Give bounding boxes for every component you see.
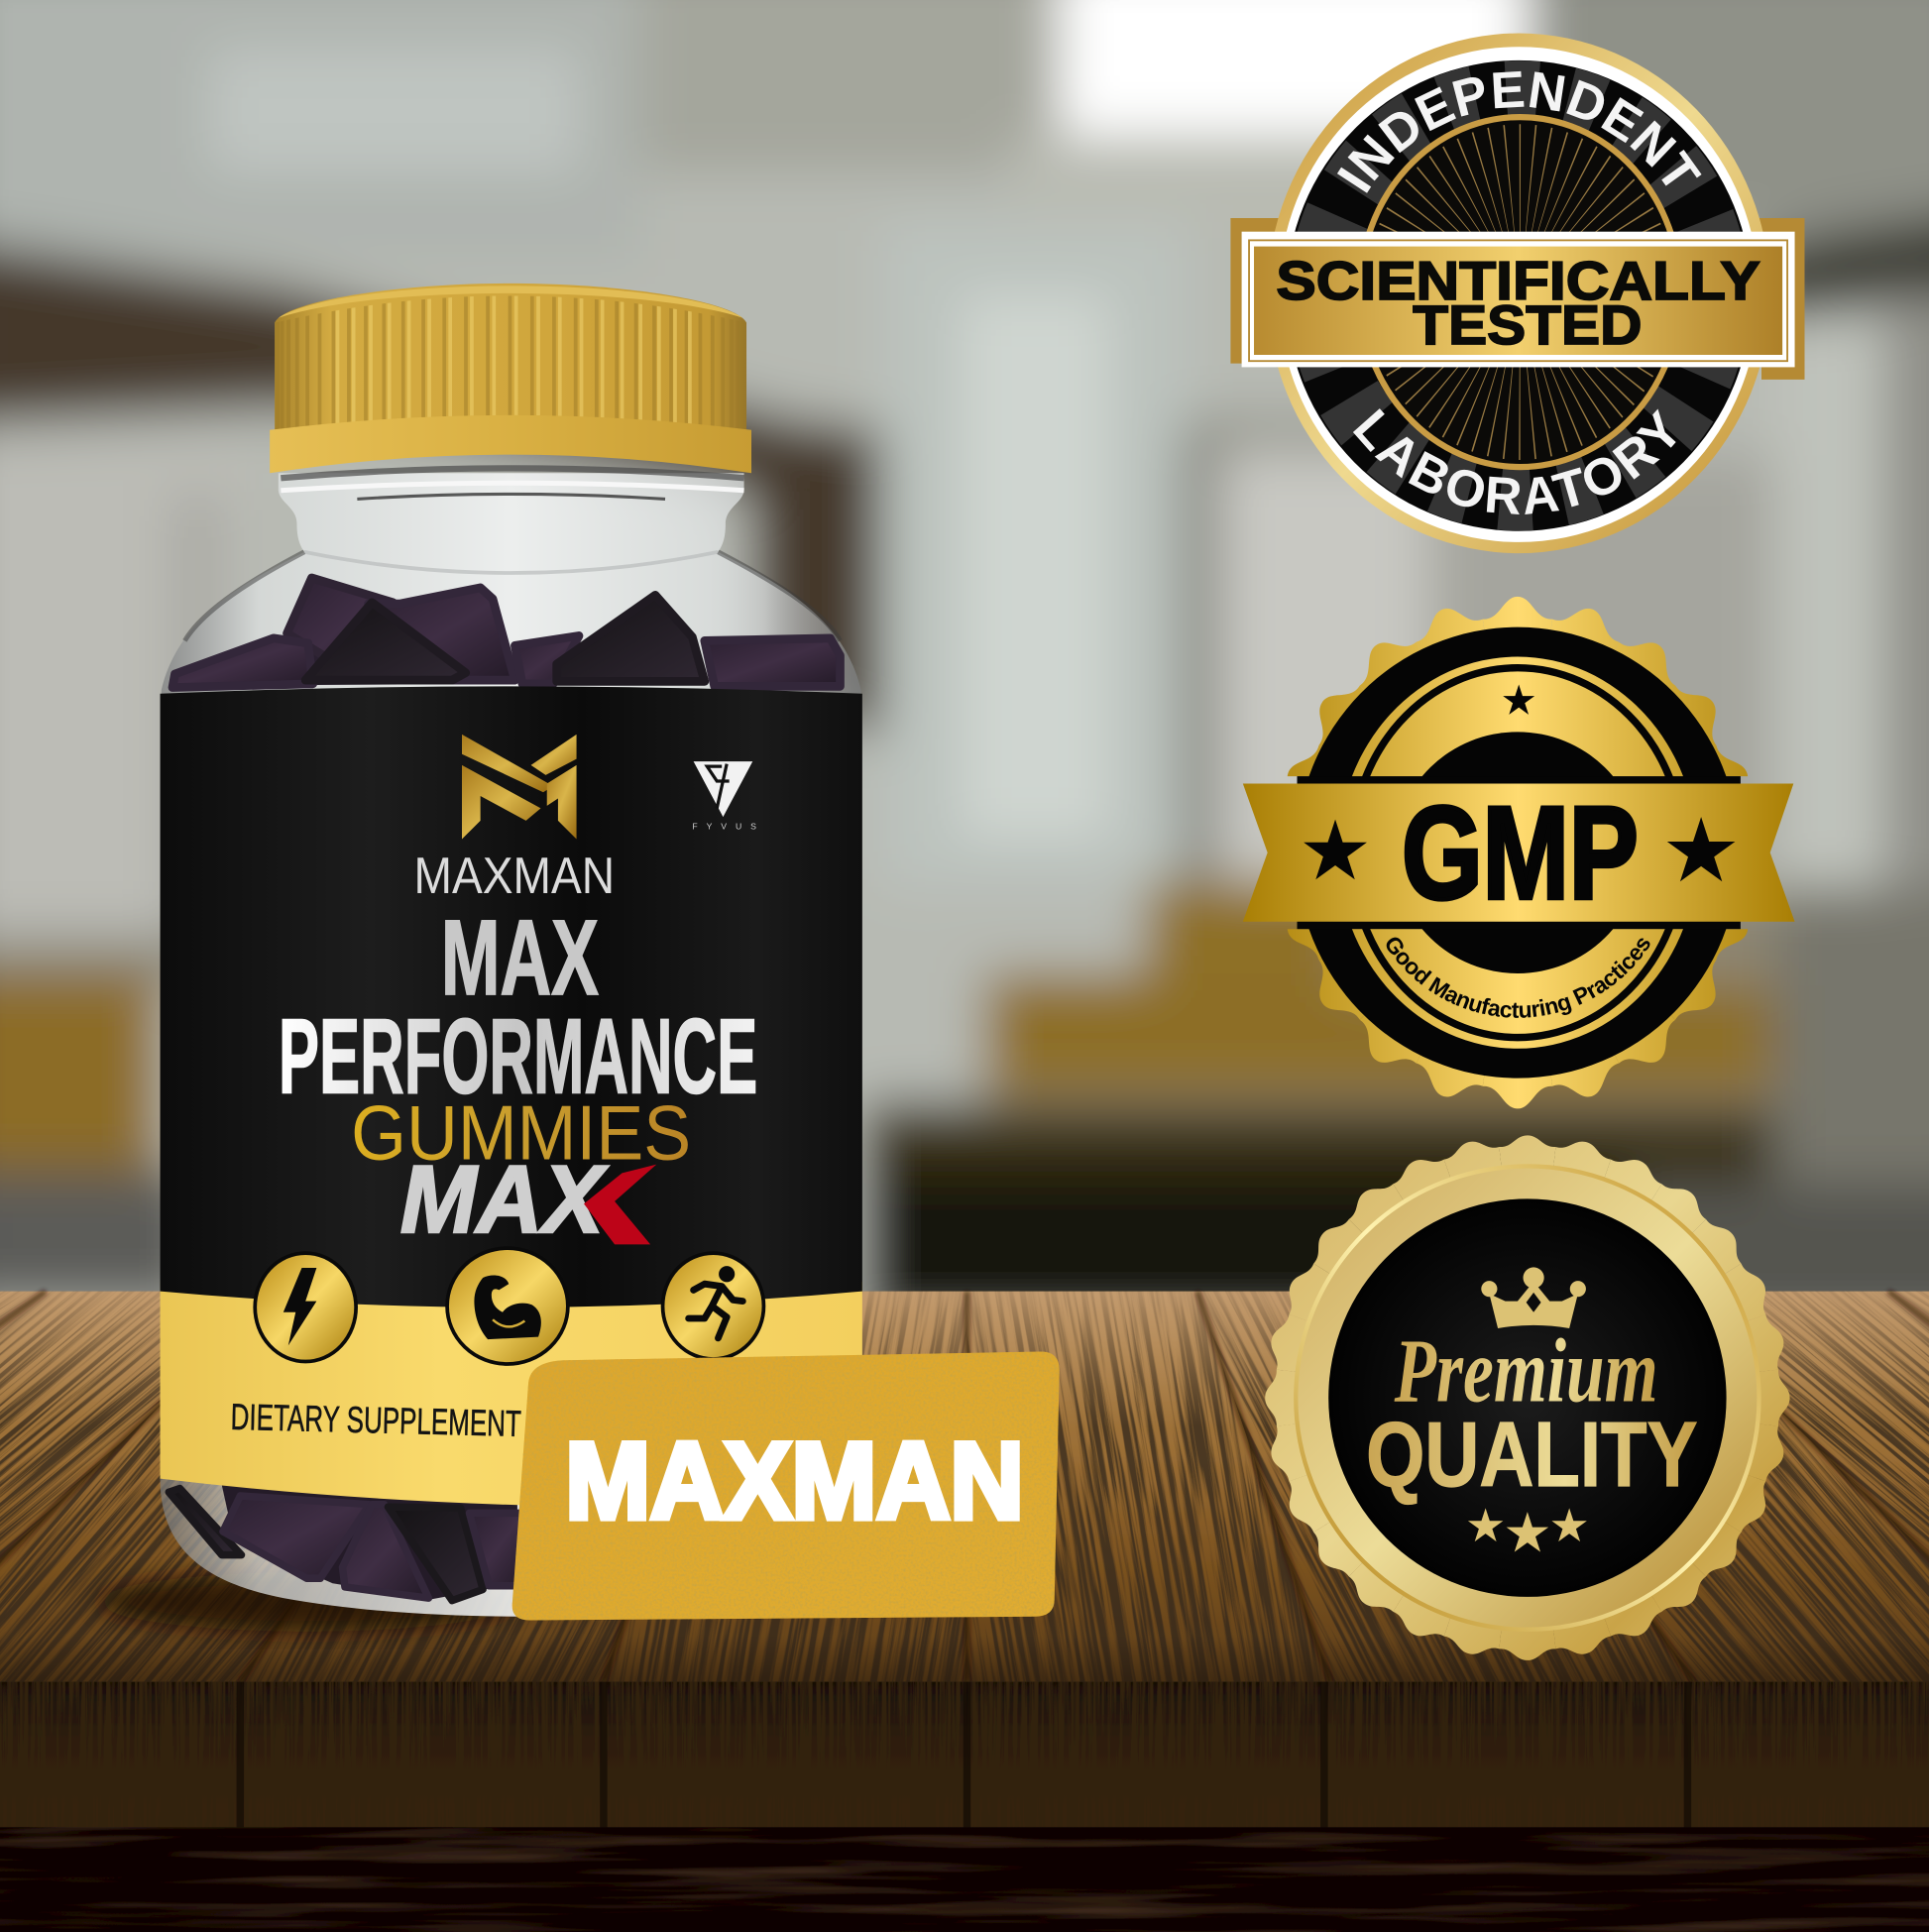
top star xyxy=(1503,684,1534,715)
blurred room background xyxy=(0,0,1929,1343)
grey wedges xyxy=(1321,94,1716,497)
black label xyxy=(161,686,862,1307)
icon: fyvus logo xyxy=(692,761,756,832)
table top planks xyxy=(0,1292,1929,1682)
black ring xyxy=(1296,627,1740,1079)
gmp letters: GMP xyxy=(1402,780,1639,927)
icon: maxman gold M logo xyxy=(462,735,577,839)
black center disc xyxy=(1395,732,1641,973)
gold inner ring xyxy=(1360,117,1680,467)
outer rim xyxy=(1268,34,1770,553)
gummies bottom xyxy=(169,1485,523,1601)
premium script: Premium xyxy=(1394,1319,1658,1421)
heading: gummies: GUMMIES xyxy=(351,1089,691,1177)
badge back ribbon xyxy=(1230,218,1804,380)
wooden table xyxy=(0,1292,1929,1932)
icon: fyvus logo: FYVUS xyxy=(692,822,756,832)
icon: energy bolt xyxy=(255,1253,356,1361)
ribbon left star xyxy=(1304,820,1367,879)
product bottle xyxy=(161,284,862,1617)
gold inner field xyxy=(1338,657,1697,1049)
sunburst rays xyxy=(1416,177,1625,406)
banner text line 2: TESTED xyxy=(1413,293,1642,356)
yellow label band xyxy=(161,1282,862,1506)
bottle shadow xyxy=(98,1572,517,1632)
table base xyxy=(0,1827,1929,1932)
scalloped seal xyxy=(1265,1135,1790,1660)
quality: QUALITY xyxy=(1366,1403,1697,1506)
arc text top: INDEPENDENT xyxy=(1337,71,1701,193)
table front face xyxy=(0,1682,1929,1827)
brand name: MAXMAN xyxy=(414,848,615,905)
arc text bottom: LABORATORY xyxy=(1353,408,1676,514)
icon: muscle arm xyxy=(447,1248,568,1364)
banner gold plate xyxy=(1249,240,1787,361)
gold ribbon xyxy=(1243,784,1795,922)
icon: running person xyxy=(663,1253,763,1359)
badge: gmp xyxy=(1243,597,1794,1108)
banner text line 1: SCIENTIFICALLY xyxy=(1276,250,1760,311)
badge: independent laboratory scientifically tested xyxy=(1230,34,1804,553)
gold brand card xyxy=(512,1352,1060,1621)
black center xyxy=(1328,1198,1727,1597)
ribbon right star xyxy=(1667,817,1735,881)
logo: max with red chevron: MAX xyxy=(400,1145,609,1253)
heading: max: MAX xyxy=(441,897,599,1017)
three stars xyxy=(1468,1508,1587,1552)
dietary supplement text: DIETARY SUPPLEMENT xyxy=(230,1396,521,1444)
glass jar xyxy=(161,473,862,1617)
arc text good manufacturing practices: Good Manufacturing Practices xyxy=(1386,938,1649,1018)
heading: performance: PERFORMANCE xyxy=(279,996,757,1116)
bottle cap xyxy=(270,284,751,473)
icon: crown xyxy=(1481,1267,1586,1328)
scalloped gold seal xyxy=(1287,597,1749,1108)
banner white frame xyxy=(1242,232,1795,367)
gummies top xyxy=(172,578,840,688)
rim ring xyxy=(1296,1166,1759,1630)
card brand text: MAXMAN xyxy=(565,1421,1024,1541)
glass highlights xyxy=(184,468,840,640)
badge: premium quality xyxy=(1265,1135,1790,1660)
